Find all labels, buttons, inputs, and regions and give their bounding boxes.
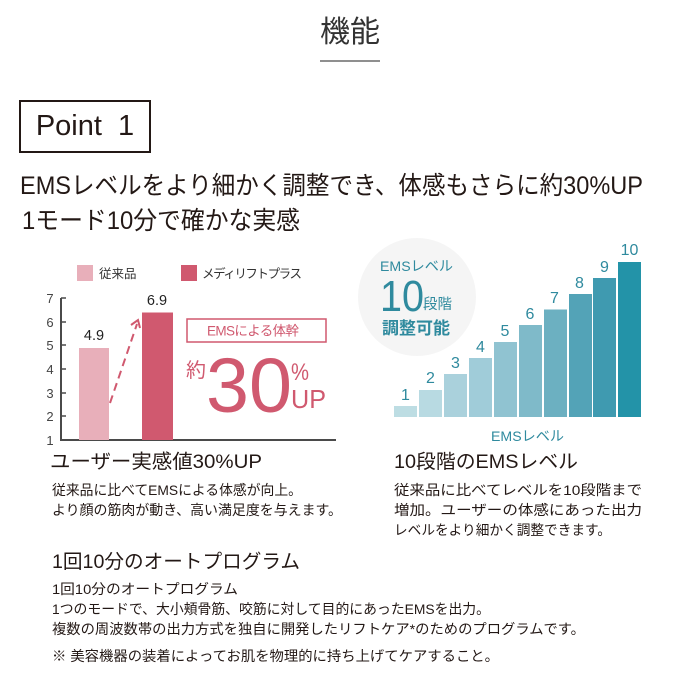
callout: 30% up	[186, 343, 326, 429]
text block: auto program: 複数の周波数帯の出力方式を独自に開発したリフトケア*のためのプログラムです。	[52, 621, 585, 637]
x axis label: EMSレベル	[491, 428, 564, 444]
callout: EMS core: EMSによる体幹	[207, 324, 300, 338]
bar: conventional: 4.9	[84, 328, 104, 344]
headline: 1モード10分で確かな実感	[22, 207, 300, 235]
axes: 7	[46, 291, 54, 306]
callout: 30% up: 約	[186, 359, 206, 382]
text block: user perception	[50, 451, 342, 518]
axes: 4	[46, 362, 54, 377]
headline	[20, 172, 643, 235]
bar labels: 4	[476, 339, 485, 356]
text block: auto program	[52, 551, 585, 664]
text block: user perception: より顔の筋肉が動き、高い満足度を与えます。	[52, 502, 342, 518]
axes	[46, 291, 336, 448]
bar labels: 2	[426, 370, 435, 387]
point badge	[19, 100, 151, 153]
bar labels: 3	[451, 355, 460, 372]
text block: user perception: ユーザー実感値30%UP	[50, 451, 262, 473]
bar labels: 8	[575, 275, 584, 292]
text block: EMS levels: レベルをより細かく調整できます。	[394, 522, 611, 538]
text block: user perception: 従来品に比べてEMSによる体感が向上。	[52, 482, 302, 498]
axes: 1	[46, 433, 54, 448]
bar labels	[401, 242, 638, 404]
callout circle	[358, 238, 476, 356]
headline: EMSレベルをより細かく調整でき、体感もさらに約30%UP	[20, 172, 643, 200]
bar labels: 1	[401, 387, 410, 404]
text block: auto program: 1回10分のオートプログラム	[52, 551, 300, 573]
title: 機能	[320, 16, 380, 49]
callout: 30% up: 30	[206, 343, 292, 429]
text block: auto program: 1回10分のオートプログラム	[52, 581, 238, 597]
text block: EMS levels: 従来品に比べてレベルを10段階まで	[394, 482, 642, 498]
axes: 3	[46, 386, 54, 401]
callout: 30% up: UP	[291, 384, 326, 414]
bar: medilift plus	[142, 293, 173, 440]
text block: auto program: ※ 美容機器の装着によってお肌を物理的に持ち上げてケアすること。	[52, 648, 499, 664]
text block: EMS levels: 10段階のEMSレベル	[394, 451, 578, 473]
bar labels: 10	[621, 242, 638, 259]
callout: EMS core	[187, 319, 326, 342]
legend	[77, 265, 302, 281]
callout circle: EMSレベル	[380, 258, 453, 274]
callout: 30% up: %	[291, 359, 309, 386]
legend: 従来品	[99, 267, 137, 281]
text block: auto program: 1つのモードで、大小頬骨筋、咬筋に対して目的にあったEMSを出力。	[52, 601, 490, 617]
legend: メディリフトプラス	[202, 266, 302, 281]
text block: EMS levels	[394, 451, 642, 538]
arrow	[110, 320, 140, 403]
text block: EMS levels: 増加。ユーザーの体感にあった出力	[394, 502, 642, 518]
axes: 5	[46, 338, 54, 353]
bar labels: 6	[526, 306, 535, 323]
axes: 6	[46, 315, 54, 330]
callout circle: 10	[380, 272, 424, 321]
bar chart: user perception	[46, 265, 336, 448]
bar labels: 7	[550, 290, 559, 307]
callout circle: 段階	[423, 296, 452, 313]
axes: 2	[46, 409, 54, 424]
point badge: Point 1	[36, 110, 134, 142]
bar labels: 9	[600, 259, 609, 276]
bar labels: 5	[501, 323, 510, 340]
bar: medilift plus: 6.9	[147, 293, 167, 309]
bar chart: EMS levels	[358, 238, 641, 444]
bars	[394, 262, 641, 417]
bar: conventional	[79, 328, 109, 440]
callout circle: 調整可能	[382, 318, 450, 338]
